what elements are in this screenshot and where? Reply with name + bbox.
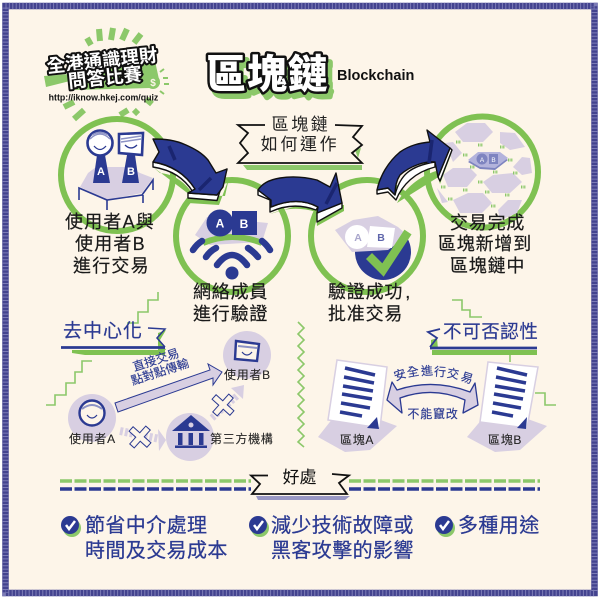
badge url: http://iknow.hkej.com/quiz	[49, 92, 159, 102]
user B: B	[127, 166, 135, 178]
step 1 circle	[61, 119, 173, 231]
heading	[428, 321, 539, 355]
double-headed arrow	[387, 382, 478, 413]
blocked route: institution to B	[206, 385, 244, 422]
user B node	[223, 331, 271, 382]
hexagon blocks	[437, 123, 532, 220]
heading: 不可否認性	[443, 321, 539, 342]
user A node	[68, 394, 116, 446]
step 1 label: 使用者B	[75, 234, 146, 254]
table	[79, 167, 153, 210]
step 2 label: 網絡成員	[193, 282, 268, 302]
benefit 1	[61, 514, 228, 562]
subtitle: Blockchain	[337, 68, 414, 84]
text: 節省中介處理	[85, 514, 207, 537]
icon: blockchain hexagon network	[437, 123, 532, 220]
icon: wifi network: B	[240, 217, 249, 231]
arrow top caption: 安	[392, 366, 408, 384]
arrow top caption: 交	[446, 365, 460, 382]
icon: wifi network	[193, 210, 270, 280]
text: 黑客攻擊的影響	[271, 539, 414, 562]
arrow top caption	[392, 364, 475, 387]
arrow top caption: 行	[434, 365, 446, 379]
arrow: step 3 to 4	[377, 130, 452, 203]
step 1 label: 使用者A與	[65, 212, 155, 232]
highlighted block: A	[480, 157, 485, 164]
banner outline	[238, 125, 362, 163]
badge sunburst	[64, 28, 152, 119]
highlighted block: B	[491, 157, 496, 164]
banner: how it works: 如何運作	[261, 135, 339, 154]
check icon	[61, 516, 81, 537]
block B document	[467, 362, 547, 452]
badge: quiz competition	[44, 28, 169, 119]
text: 多種用途	[458, 514, 540, 537]
arrow: step 1 to 2	[153, 139, 229, 205]
step 3 label: 驗證成功,	[328, 282, 411, 302]
step 3 label: 批准交易	[328, 304, 403, 324]
green links	[441, 142, 526, 206]
block A document: 區塊A	[340, 432, 374, 447]
icon: verified transaction: B	[377, 232, 385, 244]
dashed lines	[60, 481, 540, 489]
badge title: 全港通識理財	[46, 44, 158, 77]
panel: non-repudiation	[318, 321, 547, 452]
step 4 label: 區塊新增到	[438, 234, 532, 254]
icon: verified transaction: A	[354, 232, 362, 244]
arrow: step 2 to 3	[258, 173, 344, 226]
benefit 3	[435, 514, 540, 537]
heading: 去中心化	[63, 320, 143, 342]
check icon	[249, 516, 269, 537]
benefits list	[61, 514, 540, 562]
user A: A	[97, 166, 105, 178]
title: 區塊鏈	[206, 53, 329, 97]
arrow top caption: 進	[421, 364, 433, 378]
direct transfer arrow	[115, 364, 222, 412]
arrow caption: 直接交易	[131, 345, 181, 374]
banner text: 好處	[282, 468, 316, 487]
icon: wifi network: A	[216, 216, 225, 230]
badge title: 問答比賽	[67, 63, 143, 92]
arrow top caption: 易	[459, 369, 475, 387]
icon: users trading	[79, 130, 153, 210]
badge brush highlight	[44, 61, 160, 90]
benefit 2	[249, 514, 414, 562]
badge title	[46, 44, 158, 92]
step 4 label: 交易完成	[450, 213, 525, 233]
arrow caption: 點對點傳輸	[129, 355, 191, 388]
highlighted block	[468, 152, 508, 170]
blocked route: A to institution	[120, 420, 166, 454]
text: 減少技術故障或	[271, 514, 414, 537]
step 4 circle	[427, 116, 538, 228]
user B node: 使用者B	[224, 367, 271, 382]
icon: verified transaction	[335, 216, 411, 280]
arrow bottom caption: 不能竄改	[407, 406, 459, 421]
banner outline	[251, 474, 349, 494]
block A document	[318, 360, 397, 452]
third party institution: 第三方機構	[210, 431, 274, 446]
step 4 label: 區塊鏈中	[450, 256, 525, 276]
arrow top caption: 全	[406, 364, 420, 380]
banner text: 區塊鏈	[272, 115, 330, 134]
user A node: 使用者A	[69, 431, 116, 446]
step 2 circle	[176, 180, 288, 292]
panel: decentralisation	[61, 320, 274, 461]
title: 區塊鏈	[210, 58, 333, 102]
banner shadow	[256, 496, 350, 500]
step 1 label: 進行交易	[73, 256, 150, 276]
zigzag decorations	[46, 292, 556, 447]
banner shadow	[243, 148, 362, 170]
text: 時間及交易成本	[85, 539, 228, 562]
block B document: 區塊B	[488, 432, 522, 447]
step 3 circle	[311, 180, 423, 292]
benefits divider	[60, 468, 540, 500]
check icon	[435, 516, 455, 537]
third party institution	[166, 413, 274, 461]
badge coin icon: $	[150, 78, 156, 89]
step 2 label: 進行驗證	[193, 304, 268, 324]
heading	[61, 320, 166, 355]
banner: how it works	[238, 115, 362, 170]
